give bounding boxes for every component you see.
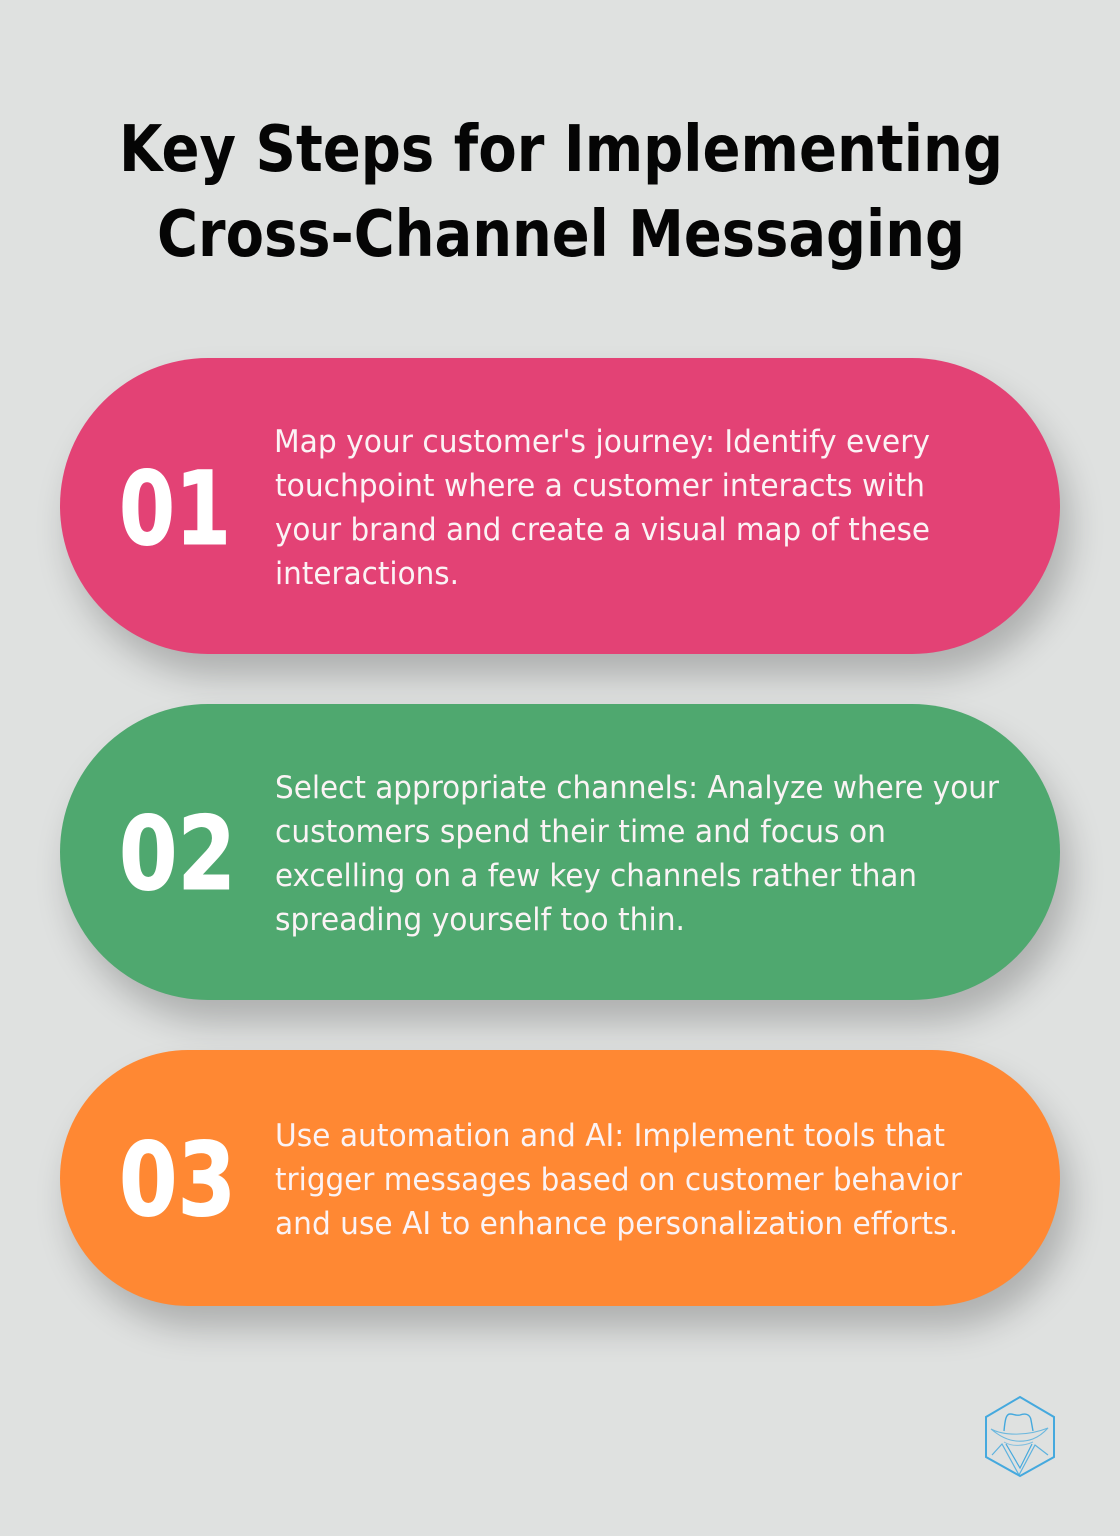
step 3 text xyxy=(275,1118,962,1242)
step 3 text: trigger messages based on customer behavior xyxy=(275,1162,962,1198)
step 2 text: excelling on a few key channels rather than xyxy=(275,858,917,894)
step 1 text xyxy=(274,424,930,592)
panel: step 2 background xyxy=(60,704,1060,1000)
panel: step 3 background xyxy=(60,1050,1060,1306)
title: Cross-Channel Messaging xyxy=(157,198,965,272)
panel: step 1 background xyxy=(60,358,1060,654)
step 1 number: 01 xyxy=(119,450,231,569)
step 2 text: spreading yourself too thin. xyxy=(275,902,685,938)
step 1 text: interactions. xyxy=(275,556,459,592)
title xyxy=(119,113,1003,272)
step 3 text: Use automation and AI: Implement tools that xyxy=(275,1118,945,1154)
step 1 text: your brand and create a visual map of these xyxy=(275,512,930,548)
icon: spy logo in hexagon xyxy=(986,1397,1054,1476)
step 2 text: customers spend their time and focus on xyxy=(275,814,886,850)
step 1 text: Map your customer's journey: Identify every xyxy=(274,424,930,460)
step 3 text: and use AI to enhance personalization efforts. xyxy=(275,1206,958,1242)
step 2 number: 02 xyxy=(119,795,236,914)
step 2 text xyxy=(275,770,999,938)
step 3 number: 03 xyxy=(119,1121,236,1240)
step 2 text: Select appropriate channels: Analyze where your xyxy=(275,770,999,806)
step 1 text: touchpoint where a customer interacts with xyxy=(275,468,925,504)
title: Key Steps for Implementing xyxy=(119,113,1003,187)
